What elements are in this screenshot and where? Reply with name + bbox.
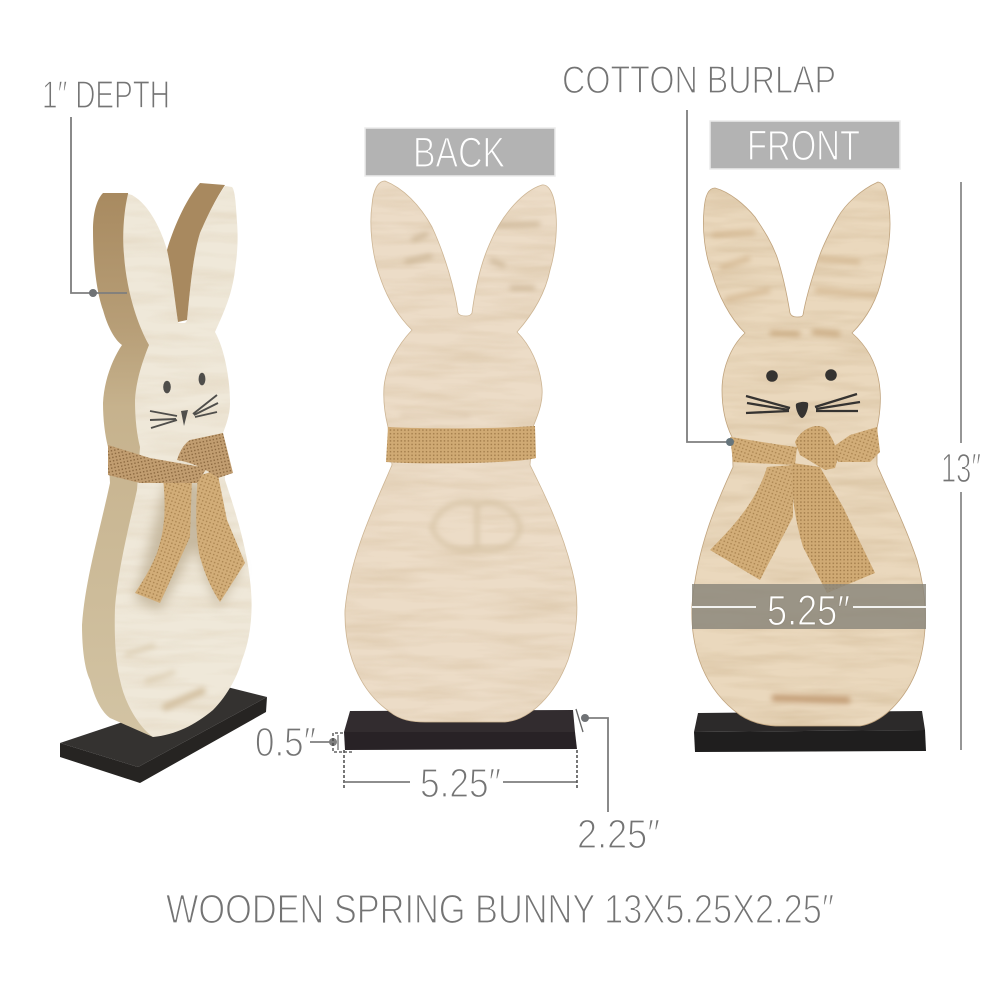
base: right bunny stand <box>694 711 926 752</box>
center bunny: back view <box>340 175 580 750</box>
label: back: BACK <box>413 129 505 177</box>
title: WOODEN SPRING BUNNY 13X5.25X2.25″ <box>166 886 834 932</box>
width band: 5.25 inch overlay: 5.25″ <box>767 587 850 635</box>
callout: 1 inch depth <box>42 74 170 297</box>
callout: cotton burlap: COTTON BURLAP <box>562 59 836 102</box>
label: front: FRONT <box>747 122 860 170</box>
dimension: 13 inch height: 13″ <box>941 445 981 491</box>
scarf: center bunny burlap band <box>386 426 536 463</box>
face details: left bunny eyes and whiskers <box>150 373 218 428</box>
dimension: 2.25 inch base depth: 2.25″ <box>577 811 660 857</box>
right bunny: front view <box>690 175 930 752</box>
dimension: 2.25 inch base depth <box>576 709 660 857</box>
scarf shadow: left bunny <box>135 480 240 610</box>
body: center bunny wood silhouette <box>345 181 577 722</box>
left bunny: angled side view <box>60 180 267 783</box>
body: right bunny wood silhouette <box>692 182 925 726</box>
dimension: 0.5 inch base thickness: 0.5″ <box>255 719 316 765</box>
scarf: right bunny burlap <box>710 426 880 593</box>
back emboss: center bunny soft stamp mark <box>432 502 520 549</box>
width band: 5.25 inch overlay <box>692 584 926 635</box>
callout: cotton burlap <box>562 59 836 446</box>
label: back <box>365 128 555 177</box>
side wall: left bunny thickness <box>82 193 180 737</box>
dimension: 5.25 inch base width <box>344 750 577 806</box>
face: left bunny front surface <box>115 186 252 737</box>
callout: 1 inch depth: 1″ DEPTH <box>42 74 170 117</box>
face details: right bunny eyes, nose, whiskers <box>746 369 860 418</box>
scarf: left bunny burlap <box>108 433 245 603</box>
dimension: 5.25 inch base width: 5.25″ <box>420 760 501 806</box>
base: left bunny stand <box>60 687 267 783</box>
right ear inner wall: left bunny <box>167 183 225 322</box>
base: center bunny stand <box>344 710 577 750</box>
